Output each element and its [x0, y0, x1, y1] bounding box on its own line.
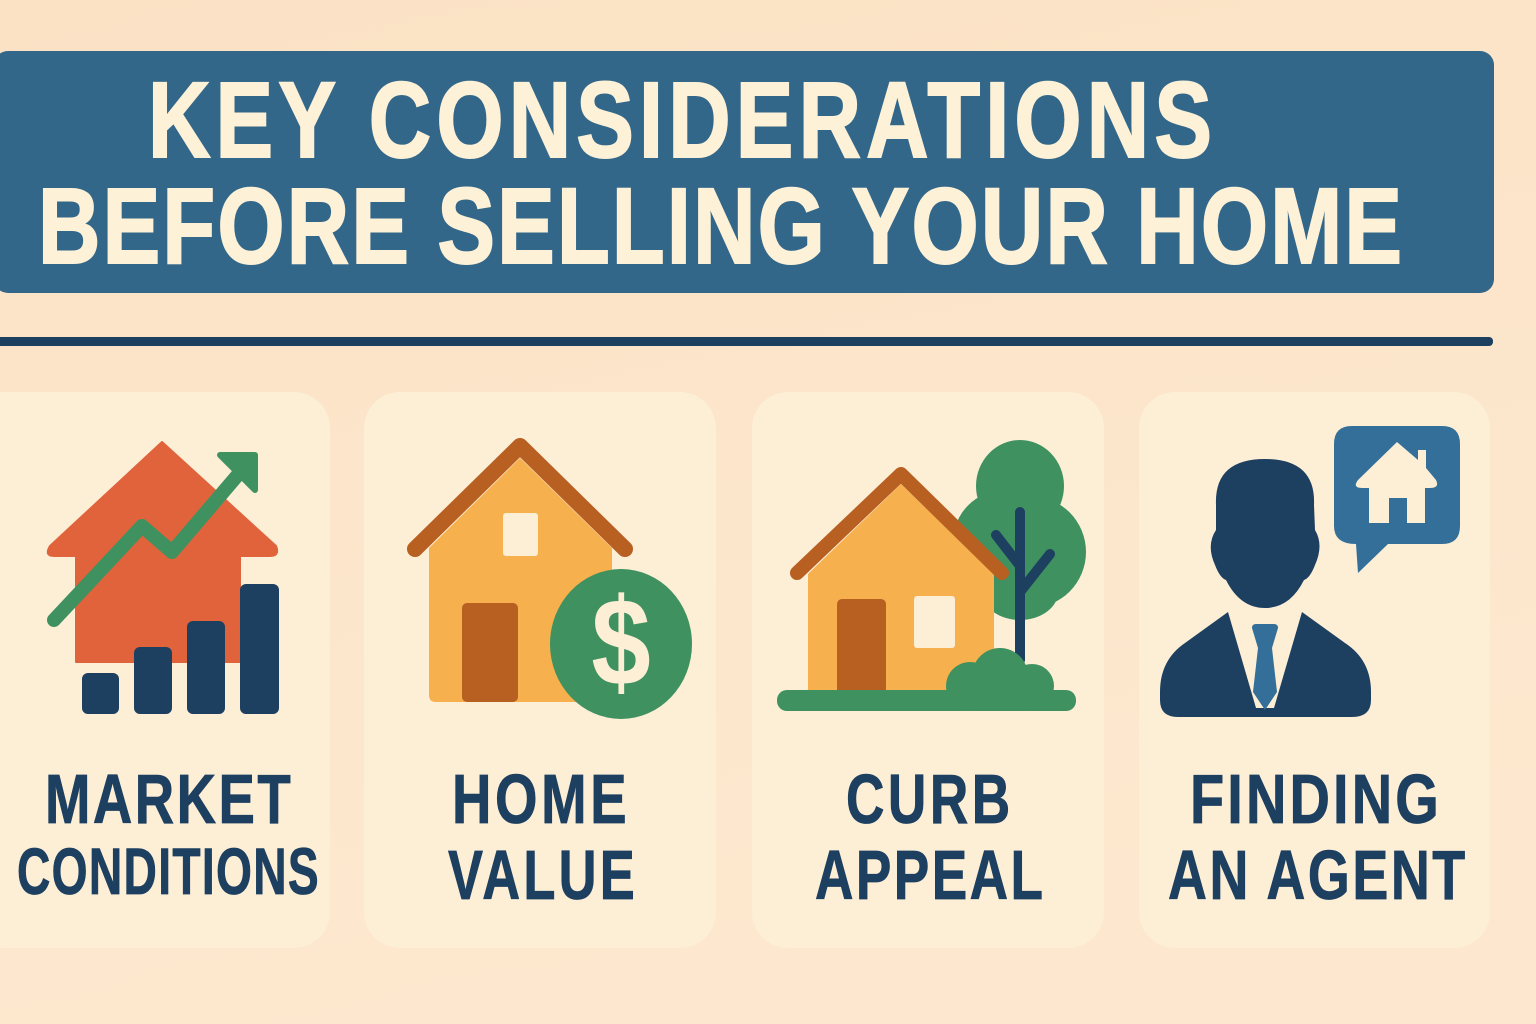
label: finding an agent: FINDING	[1190, 761, 1439, 838]
label: finding an agent	[1168, 761, 1465, 915]
label: curb appeal: CURB	[846, 761, 1010, 839]
icon: agent with house speech bubble	[1160, 426, 1460, 717]
label: market conditions	[17, 761, 319, 909]
label: market conditions: MARKET	[45, 761, 291, 839]
label: curb appeal	[815, 761, 1043, 915]
title banner	[0, 51, 1494, 293]
panel: home value	[364, 392, 716, 948]
label: finding an agent: AN AGENT	[1168, 836, 1465, 915]
icon: house with tree and bush	[777, 440, 1086, 711]
panel: finding an agent	[1139, 392, 1490, 948]
label: home value: HOME	[452, 761, 627, 839]
label: curb appeal: APPEAL	[815, 837, 1043, 915]
title line 2: BEFORE SELLING YOUR HOME	[38, 165, 1402, 286]
title line 1: KEY CONSIDERATIONS	[148, 59, 1212, 180]
icon: house with rising chart	[48, 442, 279, 714]
icon: house with dollar coin: $	[591, 572, 651, 712]
icon: house with dollar coin	[415, 446, 692, 719]
label: market conditions: CONDITIONS	[17, 835, 319, 909]
panel: curb appeal	[752, 392, 1104, 948]
label: home value	[448, 761, 635, 915]
panel: market conditions	[0, 392, 330, 948]
label: home value: VALUE	[448, 837, 635, 915]
